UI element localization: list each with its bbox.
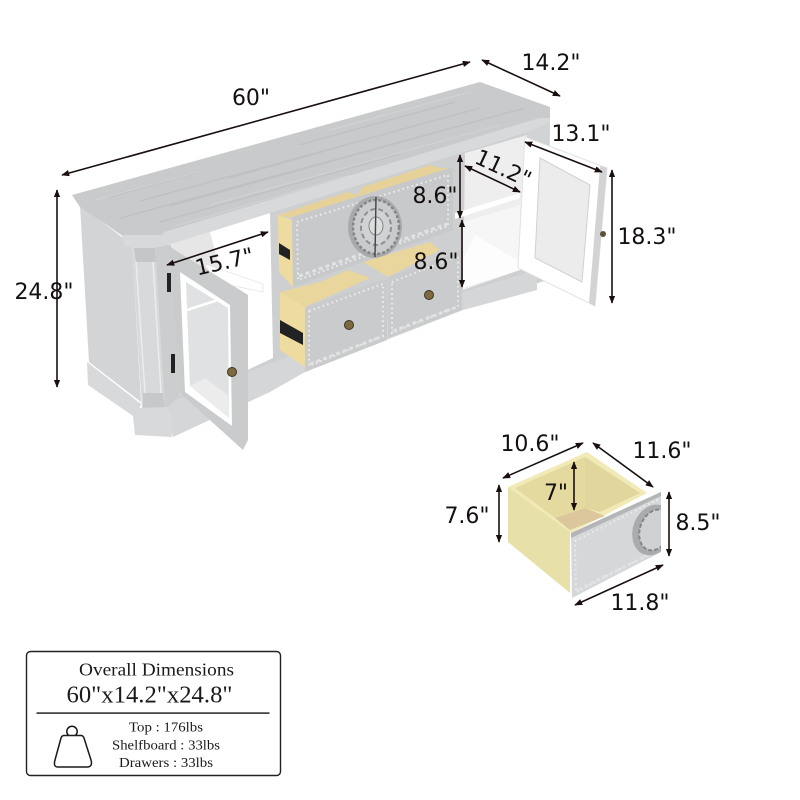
weight: shelfboard: Shelfboard : 33lbs bbox=[112, 738, 220, 752]
panel: overall dimensions bbox=[26, 652, 280, 776]
label: 11.6 in: 11.6" bbox=[632, 439, 692, 464]
left compartment bbox=[167, 213, 273, 395]
door frame strip bbox=[155, 245, 180, 410]
lower drawers bbox=[280, 242, 463, 372]
dimension arrow: 14.2 in depth bbox=[482, 60, 560, 96]
drawer outer left side bbox=[508, 487, 570, 593]
cabinet illustration bbox=[72, 82, 607, 450]
dimension arrow: 11.8 in bbox=[575, 565, 663, 605]
dimension arrow: 60 in width bbox=[62, 62, 470, 175]
upper drawers bbox=[278, 165, 453, 287]
plinth corner bbox=[133, 407, 173, 437]
dimension arrow: 11.2 in shelf bbox=[465, 166, 520, 192]
front body bbox=[150, 118, 550, 425]
weight: drawers: Drawers : 33lbs bbox=[119, 755, 213, 770]
medallion bbox=[348, 196, 402, 258]
label: 13.1 in: 13.1" bbox=[551, 122, 611, 147]
label: 60 in: 60" bbox=[232, 86, 270, 111]
drawer interior bbox=[508, 452, 647, 533]
pilaster column bbox=[132, 247, 165, 410]
knob left drawer bbox=[344, 320, 354, 330]
right door bbox=[518, 137, 607, 306]
knob right drawer bbox=[424, 290, 434, 300]
drawer illustration bbox=[508, 452, 661, 598]
dimension arrow: 7.6 in bbox=[498, 485, 500, 542]
heading: Overall Dimensions bbox=[79, 660, 234, 680]
dimension arrow: 13.1 in door bbox=[525, 142, 602, 172]
overall size: 60"x14.2"x24.8" bbox=[66, 682, 232, 708]
label: 10.6 in: 10.6" bbox=[500, 432, 560, 457]
dimension arrow: 8.6 in upper drawer bbox=[459, 155, 461, 218]
dimension arrow: 8.5 in bbox=[668, 492, 670, 556]
plinth base side bbox=[87, 362, 141, 418]
label: 11.2 in: 11.2" bbox=[471, 145, 535, 193]
label: 8.6 in upper: 8.6" bbox=[412, 184, 458, 209]
dimension arrow: 24.8 in height bbox=[56, 190, 58, 387]
label: 14.2 in: 14.2" bbox=[521, 51, 581, 76]
drawer front panel bbox=[571, 492, 661, 598]
label: 15.7 in: 15.7" bbox=[193, 244, 256, 281]
label: 24.8 in: 24.8" bbox=[14, 280, 74, 305]
dimension arrow: 8.6 in lower drawer bbox=[461, 220, 463, 287]
label: 7.6 in: 7.6" bbox=[444, 504, 490, 529]
label: 8.6 in lower: 8.6" bbox=[413, 250, 459, 275]
dimension arrow: 7 in bbox=[573, 462, 575, 510]
top surface bbox=[72, 82, 550, 247]
dimension arrow: 10.6 in bbox=[503, 443, 583, 478]
dimension arrow: 15.7 in compartment bbox=[167, 232, 268, 265]
left side panel bbox=[80, 205, 141, 402]
label: 7 in: 7" bbox=[544, 481, 568, 506]
label: 18.3 in: 18.3" bbox=[617, 225, 677, 250]
right compartment bbox=[455, 135, 527, 290]
base front bbox=[167, 270, 537, 437]
dimension arrow: 11.6 in bbox=[593, 443, 653, 487]
icon: weight bbox=[54, 726, 92, 767]
dimension arrow: 18.3 in door height bbox=[611, 170, 613, 303]
right pillar bbox=[526, 124, 549, 150]
label: 11.8 in: 11.8" bbox=[610, 591, 670, 616]
weight: top: Top : 176lbs bbox=[129, 720, 203, 734]
left door bbox=[167, 247, 248, 450]
label: 8.5 in: 8.5" bbox=[675, 511, 721, 536]
